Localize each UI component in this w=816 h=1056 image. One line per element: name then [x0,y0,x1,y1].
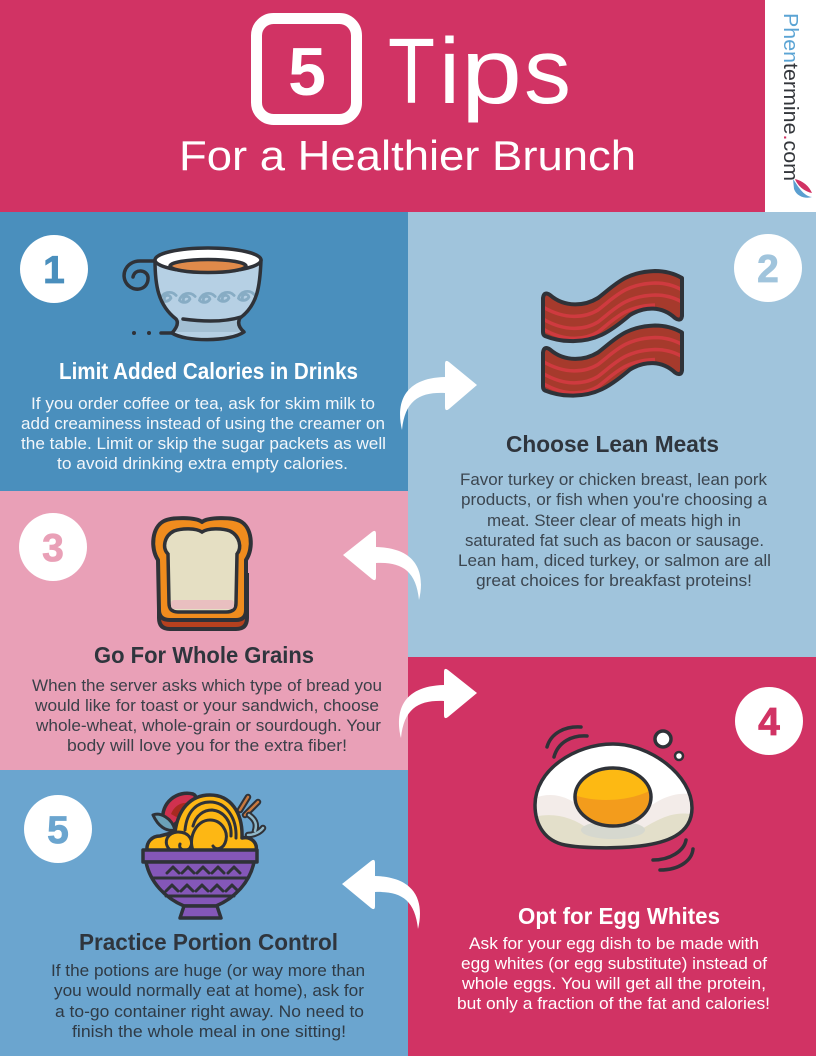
arrow: tip 2 to tip 3 [343,531,421,600]
number badge 5: 5 [47,809,69,852]
title badge: 5: 5 [288,34,326,110]
bacon strip top [543,271,682,341]
number badge 4: 4 [758,701,780,744]
panel: tip 3 grains [0,491,408,770]
title: Tips: i [439,19,460,123]
number badge 4 [735,687,803,755]
icon: fried egg [530,727,695,870]
title: Tips: p [461,19,522,123]
body text: but only a fraction of the fat and calories! [457,994,770,1013]
bacon strip bottom [543,326,682,396]
title badge: 5 [256,18,356,120]
icon: noodle bowl [143,793,263,918]
body text: saturated fat such as bacon or sausage. [465,531,764,550]
body text: Ask for your egg dish to be made with [469,934,759,953]
body text: Lean ham, diced turkey, or salmon are all [458,551,771,570]
panel: header [0,0,816,213]
icon: bacon [543,271,682,396]
logo: Phentermine.com: Phen termine . com [779,13,801,181]
body text: products, or fish when you're choosing a [461,490,768,509]
number badge 3 [19,513,87,581]
number badge 3: 3 [42,527,64,570]
panel: tip 2 meats [408,212,816,657]
number badge 1: 1 [43,249,65,292]
icon: toast [153,518,251,629]
body text: body will love you for the extra fiber! [67,736,347,755]
icon: teacup [124,248,261,340]
number badge 5 [24,795,92,863]
body text [51,961,365,1041]
title: Tips [388,19,571,123]
body text: great choices for breakfast proteins! [476,571,752,590]
title: Tips: T [388,19,435,123]
body text [32,676,382,755]
heading: Choose Lean Meats [506,431,719,457]
heading: Go For Whole Grains [94,642,314,668]
arrow: tip 3 to tip 4 [399,669,477,738]
panel: tip 5 portions [0,770,408,1056]
body text: egg whites (or egg substitute) instead of [461,954,767,973]
body text: to avoid drinking extra empty calories. [57,454,348,473]
heading: Opt for Egg Whites [518,903,720,929]
body text: whole eggs. You will get all the protein, [461,974,766,993]
heading: Practice Portion Control [79,929,338,955]
panel: tip 1 drinks [0,212,408,491]
body text: finish the whole meal in one sitting! [72,1022,346,1041]
body text: Favor turkey or chicken breast, lean pork [460,470,767,489]
body text: If you order coffee or tea, ask for skim milk to [31,394,375,413]
number badge 2: 2 [757,248,779,291]
subtitle: For a Healthier Brunch [179,132,636,179]
panel: tip 4 eggs [408,657,816,1056]
body text: If the potions are huge (or way more than [51,961,365,980]
logo: Phentermine.com [765,0,816,213]
arrow: tip 1 to tip 2 [400,361,477,430]
arrow: tip 4 to tip 5 [342,860,420,929]
body text: a to-go container right away. No need to [55,1002,364,1021]
body text: the table. Limit or skip the sugar packets as well [21,434,386,453]
body text: add creaminess instead of using the creamer on [21,414,385,433]
title: Tips: s [524,19,571,123]
body text: meat. Steer clear of meats high in [487,511,741,530]
number badge 1 [20,235,88,303]
number badge 2 [734,234,802,302]
heading: Limit Added Calories in Drinks [59,358,358,384]
body text [458,470,771,590]
body text [21,394,386,473]
body text: would like for toast or your sandwich, choose [34,696,379,715]
body text [457,934,770,1013]
body text: When the server asks which type of bread you [32,676,382,695]
body text: you would normally eat at home), ask for [54,981,364,1000]
body text: whole-wheat, whole-grain or sourdough. Your [35,716,381,735]
